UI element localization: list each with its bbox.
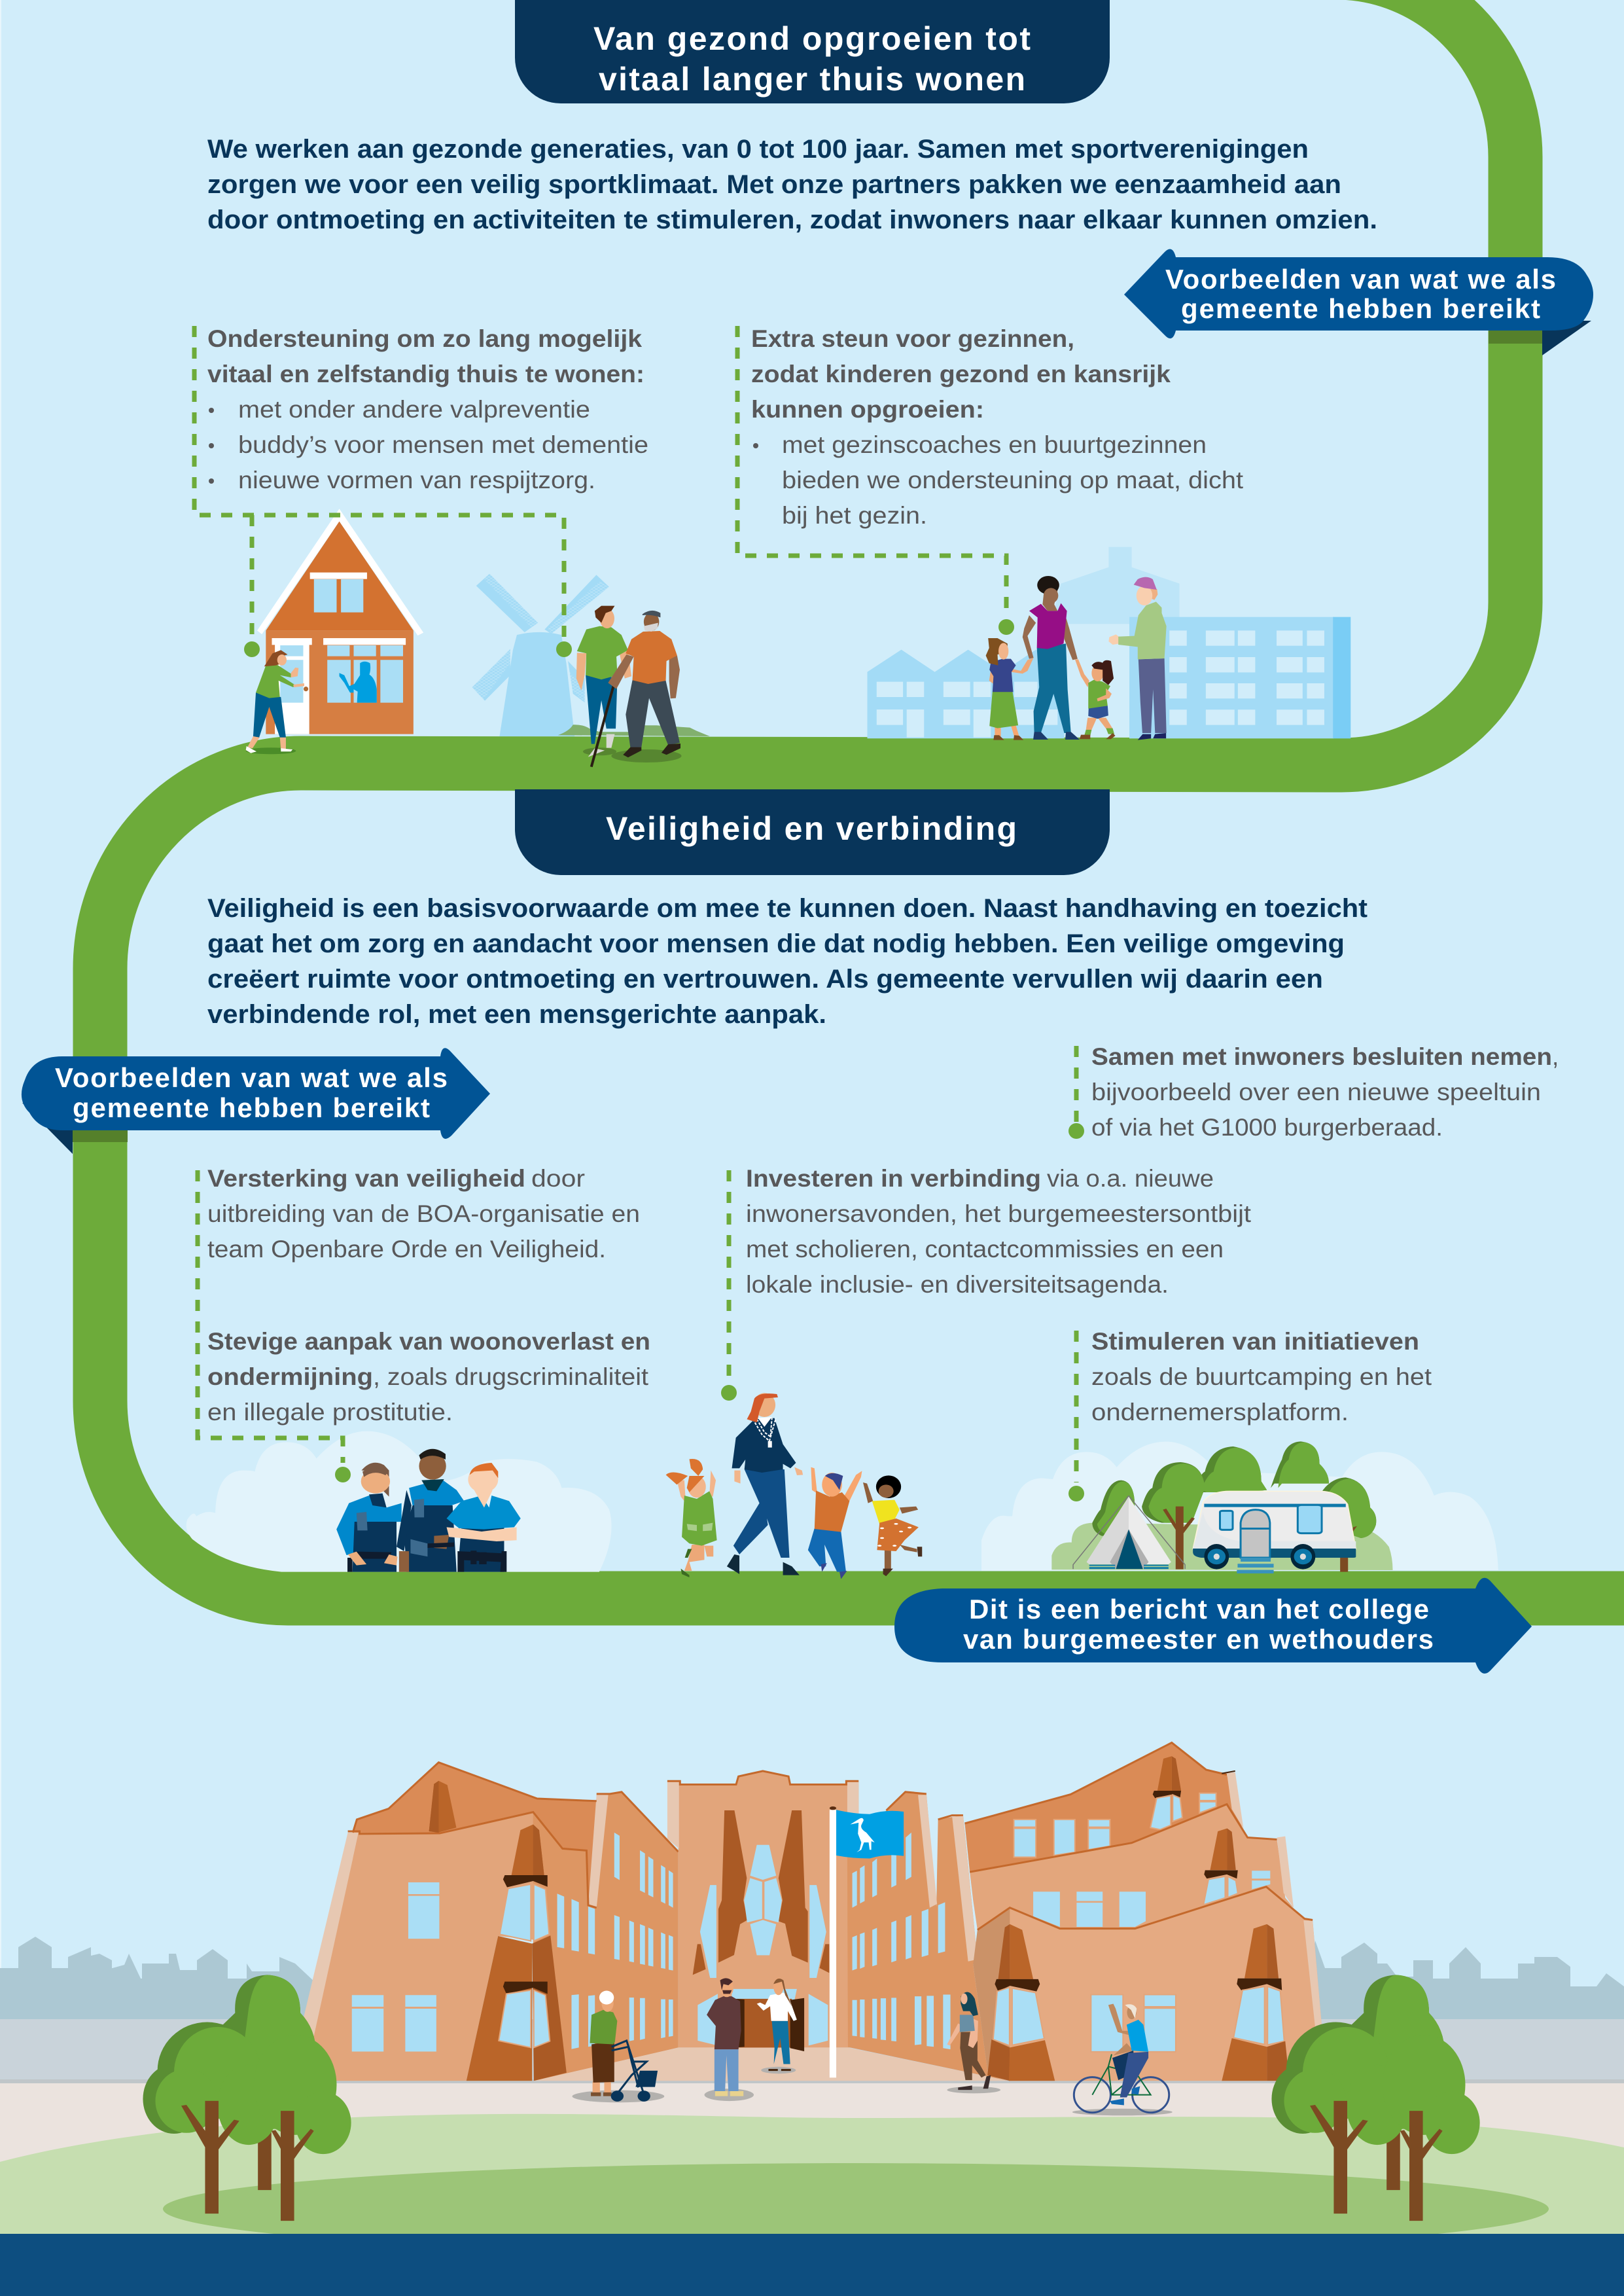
person: jumping girl [666, 1459, 717, 1577]
connector versterking [198, 1170, 351, 1482]
bottom scene: skyline and ground [0, 1937, 1624, 2240]
text block: samen met inwoners: , [1552, 1043, 1559, 1070]
text block: versterking en aanpak: ondermijning [207, 1363, 373, 1390]
person: bearded man [705, 1978, 754, 2101]
text block: versterking en aanpak: en illegale prostitutie. [207, 1399, 453, 1426]
person: girl with skirt [986, 638, 1034, 740]
wing: back right [964, 1743, 1243, 1872]
text block: investeren: Investeren in verbinding [746, 1165, 1041, 1192]
text block: stimuleren [1091, 1328, 1432, 1426]
text block: investeren: lokale inclusie- en diversiteitsagenda. [746, 1271, 1169, 1298]
text block: investeren [746, 1165, 1252, 1298]
icon: bush [558, 725, 710, 736]
intro text section 2: gaat het om zorg en aandacht voor mensen die dat nodig hebben. Een veilige omgeving [207, 929, 1345, 958]
text block: extra steun: bij het gezin. [782, 502, 927, 529]
person: mayor [727, 1393, 803, 1575]
arrow badge: voorbeelden (right): gemeente hebben bereikt [1181, 293, 1540, 324]
connector stimuleren [1068, 1331, 1084, 1501]
text block: extra steun: met gezinscoaches en buurtgezinnen [782, 431, 1207, 458]
person: officer woman [336, 1463, 402, 1572]
wing: front right [973, 1887, 1322, 2081]
text block: versterking en aanpak [207, 1165, 650, 1426]
scene: family and buildings [868, 547, 1350, 740]
text block: ondersteuning: met onder andere valpreventie [238, 396, 590, 423]
text block: ondersteuning: nieuwe vormen van respijtzorg. [238, 467, 595, 493]
text block: stimuleren: ondernemersplatform. [1091, 1399, 1349, 1426]
building: centre entrance [534, 1771, 1009, 2081]
text block: ondersteuning: Ondersteuning om zo lang mogelijk [207, 325, 642, 352]
text block: samen met inwoners: Samen met inwoners besluiten nemen [1091, 1043, 1552, 1070]
connector dot right block [998, 619, 1014, 635]
intro text section 2: verbindende rol, met een mensgerichte aanpak. [207, 1000, 826, 1029]
icon: tent [1073, 1496, 1185, 1569]
arrow badge: voorbeelden (left): Voorbeelden van wat we als [55, 1062, 448, 1093]
title tab: gezond opgroeien: vitaal langer thuis wonen [599, 61, 1025, 98]
scene: police and mayor with children [186, 1393, 922, 1579]
arrow badge: voorbeelden (left) [22, 1048, 490, 1154]
arrow badge: voorbeelden (right): Voorbeelden van wat we als [1165, 264, 1556, 295]
icon: windmill [472, 574, 609, 736]
building: right wings [830, 1743, 1322, 2081]
person: man with cap [1108, 577, 1167, 740]
title tab: gezond opgroeien [515, 0, 1110, 103]
icon: left trees [143, 1975, 351, 2221]
text block: versterking en aanpak: door [531, 1165, 585, 1192]
title tab: veiligheid: Veiligheid en verbinding [606, 810, 1017, 847]
icon: right trees [1271, 1975, 1480, 2221]
text block: samen met inwoners: bijvoorbeeld over een nieuwe speeltuin [1091, 1079, 1541, 1105]
person: boy [808, 1467, 862, 1579]
icon: trees [1092, 1441, 1376, 1572]
person: woman at door [246, 650, 304, 754]
connector dots left block [244, 641, 572, 657]
text block: samen met inwoners [1091, 1043, 1559, 1141]
dashed connector left block [194, 326, 564, 640]
icon: caravan [1193, 1491, 1356, 1573]
arrow badge: bericht college [894, 1578, 1532, 1674]
person: woman in purple [1023, 576, 1080, 740]
building: town hall [303, 1743, 1322, 2115]
icon: house [257, 509, 423, 734]
icon: background buildings [868, 547, 1350, 738]
title tab: veiligheid [515, 789, 1110, 875]
text block: investeren: via o.a. nieuwe [1047, 1165, 1214, 1192]
hills and bottom band [0, 2114, 1624, 2296]
intro text section 1: door ontmoeting en activiteiten te stimuleren, zodat inwoners naar elkaar kunnen omzien. [207, 206, 1377, 234]
green winding road [100, 0, 1624, 1598]
intro text section 1: zorgen we voor een veilig sportklimaat. Met onze partners pakken we eenzaamheid aan [207, 170, 1341, 199]
person: walking woman [947, 1992, 1000, 2093]
text block: extra steun [751, 325, 1244, 529]
text block: extra steun: kunnen opgroeien: [751, 396, 984, 423]
arrow badge: bericht college: van burgemeester en wethouders [963, 1624, 1434, 1655]
text block: samen met inwoners: of via het G1000 burgerberaad. [1091, 1114, 1443, 1141]
text block: ondersteuning: buddy’s voor mensen met dementie [238, 431, 648, 458]
text block: versterking en aanpak: team Openbare Orde en Veiligheid. [207, 1236, 606, 1263]
text block: ondersteuning: vitaal en zelfstandig thuis te wonen: [207, 361, 644, 387]
text block: versterking en aanpak: uitbreiding van de BOA-organisatie en [207, 1200, 640, 1227]
arrow badge: bericht college: Dit is een bericht van het college [969, 1594, 1429, 1624]
person: older man with cane [608, 611, 682, 762]
building: left wing [303, 1763, 679, 2081]
intro text section 1 [207, 135, 1377, 234]
text block: extra steun: Extra steun voor gezinnen, [751, 325, 1074, 352]
person: officer man [397, 1449, 464, 1572]
text block: versterking en aanpak: , zoals drugscriminaliteit [373, 1363, 649, 1390]
text block: ondersteuning [207, 325, 648, 493]
scene: camping [981, 1441, 1498, 1573]
text block: investeren: inwonersavonden, het burgemeestersontbijt [746, 1200, 1252, 1227]
text block: stimuleren: Stimuleren van initiatieven [1091, 1328, 1419, 1355]
text block: investeren: met scholieren, contactcommissies en een [746, 1236, 1224, 1263]
icon: cloud [981, 1442, 1498, 1571]
text block: stimuleren: zoals de buurtcamping en het [1091, 1363, 1432, 1390]
connector investeren [721, 1170, 737, 1401]
person: girl with dotted skirt [863, 1475, 922, 1576]
connector samen [1068, 1046, 1084, 1139]
text block: versterking en aanpak: Stevige aanpak van woonoverlast en [207, 1328, 650, 1355]
scene: house, windmill, people [246, 509, 710, 767]
text block: extra steun: bieden we ondersteuning op maat, dicht [782, 467, 1244, 493]
icon: bushes [1051, 1523, 1393, 1570]
intro text section 1: We werken aan gezonde generaties, van 0 tot 100 jaar. Samen met sportverenigingen [207, 135, 1309, 164]
arrow badge: voorbeelden (left): gemeente hebben bereikt [73, 1092, 430, 1123]
person: man in green [576, 606, 631, 767]
person: officer red hair [446, 1463, 521, 1572]
text block: versterking en aanpak: Versterking van veiligheid [207, 1165, 525, 1192]
icon: cloud [186, 1431, 612, 1572]
icon: flag with stork [830, 1806, 904, 2077]
text block: extra steun: zodat kinderen gezond en kansrijk [751, 361, 1171, 387]
title tab: gezond opgroeien: Van gezond opgroeien tot [593, 20, 1031, 57]
person: woman in white [757, 1978, 797, 2073]
person: grandmother with rollator [572, 1991, 664, 2102]
wing: middle right [970, 1804, 1294, 1930]
intro text section 2 [207, 894, 1368, 1029]
person: girl in green shirt [1075, 659, 1116, 739]
intro text section 2: creëert ruimte voor ontmoeting en vertrouwen. Als gemeente vervullen wij daarin een [207, 965, 1323, 994]
intro text section 2: Veiligheid is een basisvoorwaarde om mee te kunnen doen. Naast handhaving en toezicht [207, 894, 1368, 923]
dashed connector right block [737, 326, 1006, 613]
arrow badge: voorbeelden (right) [1124, 249, 1593, 355]
person: cyclist [1072, 2003, 1173, 2115]
